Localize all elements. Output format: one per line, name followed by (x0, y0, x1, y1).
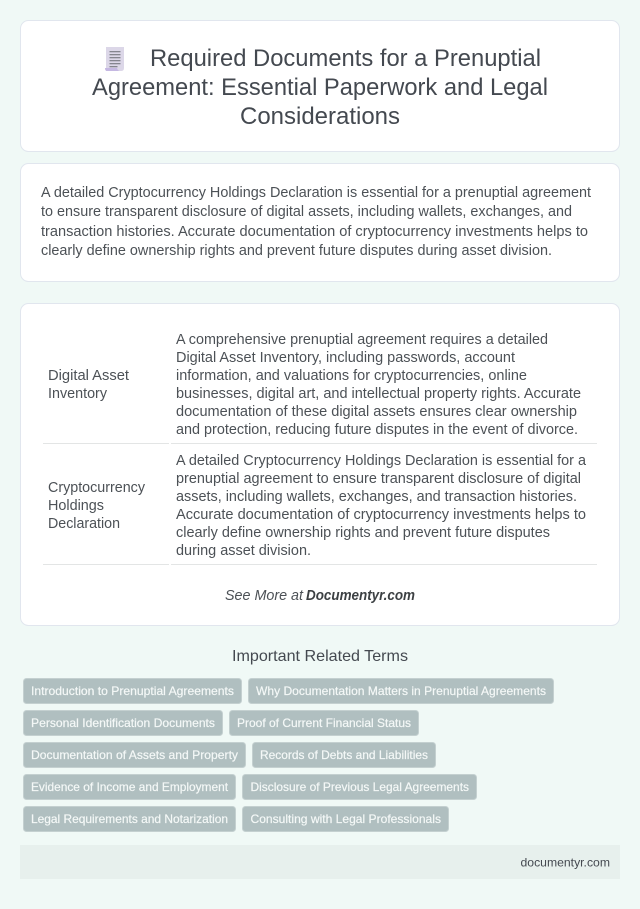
table row: cryptocurrency holdings declaration: Holdings (48, 498, 104, 514)
tag (24, 774, 236, 800)
title: Agreement: Essential Paperwork and Legal (92, 74, 548, 101)
text block: introduction paragraph (41, 185, 591, 259)
tag (252, 742, 436, 768)
text block: introduction paragraph: A detailed Cryptocurrency Holdings Declaration is essential for a prenuptial agreement (41, 185, 591, 201)
table row: digital asset inventory: documentation of these digital assets ensures clear ownership (176, 404, 577, 420)
tag: Evidence of Income and Employment (31, 780, 229, 794)
link: see more: Documentyr.com (306, 588, 415, 604)
tag: Consulting with Legal Professionals (250, 812, 441, 826)
table row: digital asset inventory: Inventory (48, 386, 108, 402)
table row: cryptocurrency holdings declaration (48, 453, 586, 559)
table row: cryptocurrency holdings declaration: Declaration (48, 516, 120, 532)
tag (24, 678, 242, 704)
tag (24, 710, 222, 736)
table row: digital asset inventory (48, 332, 581, 438)
tag: Introduction to Prenuptial Agreements (31, 684, 234, 698)
footer bar (20, 845, 620, 879)
table row: digital asset inventory: and protection, reducing future disputes in the event of divorce. (176, 422, 578, 438)
tag (230, 710, 418, 736)
icon: document ledger (105, 47, 124, 71)
tag (242, 806, 448, 832)
table row: digital asset inventory: Digital Asset Inventory, including passwords, account (176, 350, 515, 366)
table row: cryptocurrency holdings declaration: A detailed Cryptocurrency Holdings Declaration is essential for a (176, 453, 586, 469)
table row: digital asset inventory: information, and valuations for cryptocurrencies, online (176, 368, 527, 384)
table row: cryptocurrency holdings declaration: Cryptocurrency (48, 480, 146, 496)
table row: cryptocurrency holdings declaration: during asset division. (176, 543, 311, 559)
tag: Proof of Current Financial Status (237, 716, 411, 730)
table row: cryptocurrency holdings declaration: prenuptial agreement to ensure transparent disclosure of digital (176, 471, 581, 487)
title: Considerations (240, 103, 400, 130)
link: see more (225, 588, 415, 604)
tag: Legal Requirements and Notarization (31, 812, 228, 826)
panel: title card (20, 20, 620, 152)
heading: important related terms: Important Related Terms (232, 648, 408, 665)
table row: cryptocurrency holdings declaration: assets, including wallets, exchanges, and transaction histories. (176, 489, 577, 505)
table row: digital asset inventory: A comprehensive prenuptial agreement requires a detailed (176, 332, 548, 348)
title: Required Documents for a Prenuptial (150, 45, 541, 72)
tag (242, 774, 476, 800)
table row: digital asset inventory: businesses, digital art, and intellectual property rights. Accurate (176, 386, 581, 402)
tag: Records of Debts and Liabilities (260, 748, 428, 762)
tag: Why Documentation Matters in Prenuptial Agreements (256, 684, 546, 698)
title (92, 45, 548, 130)
table row: digital asset inventory: Digital Asset (48, 368, 129, 384)
text block: introduction paragraph: clearly define ownership rights and prevent future disputes during asset division. (41, 243, 552, 259)
footer bar: documentyr.com (520, 856, 610, 870)
text block: introduction paragraph: to ensure transparent disclosure of digital assets, including wallets, exchanges, and (41, 204, 572, 220)
tag: Disclosure of Previous Legal Agreements (250, 780, 469, 794)
tag list: related terms (24, 678, 554, 832)
tag: Documentation of Assets and Property (31, 748, 238, 762)
tag: Personal Identification Documents (31, 716, 215, 730)
tag (24, 806, 236, 832)
link: see more: See More at (225, 588, 304, 604)
text block: introduction paragraph: transaction histories. Accurate documentation of cryptocurrency investments helps to (41, 224, 588, 240)
table row: cryptocurrency holdings declaration: Accurate documentation of cryptocurrency investments helps to (176, 507, 586, 523)
tag (248, 678, 554, 704)
table row: cryptocurrency holdings declaration: clearly define ownership rights and prevent future disputes (176, 525, 550, 541)
panel: introduction (20, 164, 620, 282)
panel: documents table (20, 304, 620, 626)
tag (24, 742, 246, 768)
